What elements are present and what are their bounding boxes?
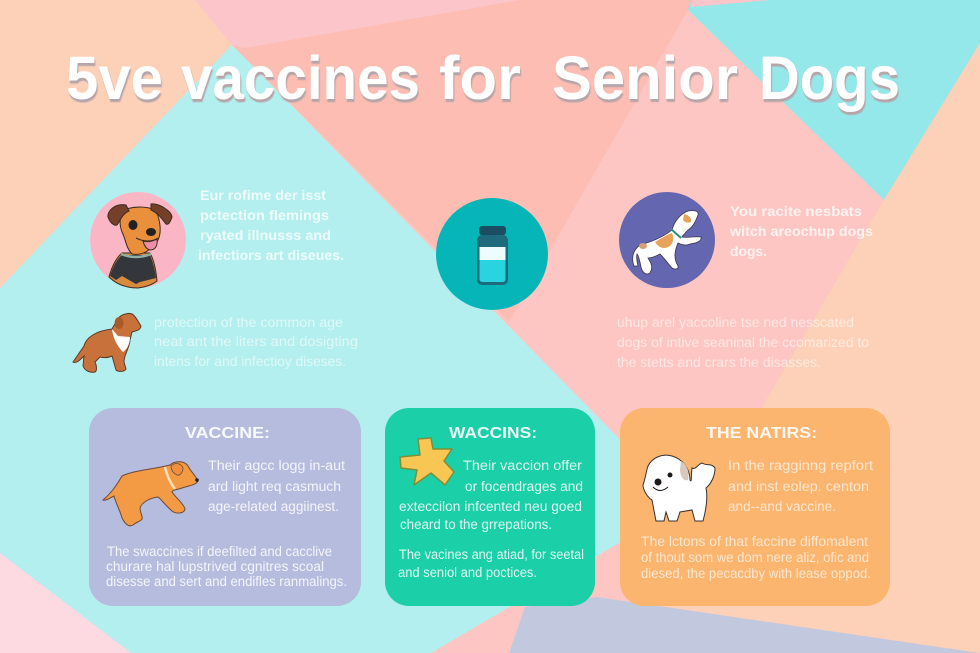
text: natirs lower: of thout som we dom nere aliz, ofic and bbox=[641, 550, 869, 565]
text: waccins lower: The vacines ang atiad, for seetal bbox=[399, 547, 584, 562]
heading: natirs: THE NATIRS: bbox=[706, 425, 817, 442]
text block: top right: dogs. bbox=[730, 243, 767, 259]
icon: orange puppy walking bbox=[103, 462, 199, 526]
text: vaccine upper: Their agcc logg in-aut bbox=[208, 458, 345, 473]
text block: lower right bbox=[617, 315, 869, 370]
heading: vaccine: VACCINE: bbox=[185, 425, 270, 442]
text: natirs lower: The lctons of that faccine diffomalent bbox=[641, 534, 868, 549]
text block: top left: Eur rofime der isst bbox=[200, 187, 326, 203]
text block: lower right: uhup arel yaccoline tse ned nesscated bbox=[617, 315, 854, 330]
text: vaccine upper: ard light req casmuch bbox=[208, 479, 341, 494]
text block: top left bbox=[198, 187, 344, 263]
heading: waccins: WACCINS: bbox=[449, 425, 537, 442]
title: Dogs bbox=[759, 44, 900, 112]
text: natirs lower bbox=[641, 534, 871, 581]
text: waccins upper: exteccilon infcented neu goed bbox=[399, 499, 582, 514]
icon: dog in purple circle bbox=[619, 192, 715, 288]
icon: brown dog standing bbox=[73, 313, 141, 372]
text block: lower left: neat ant the liters and dosigting bbox=[154, 334, 358, 349]
text: waccins lower bbox=[398, 547, 584, 580]
text: natirs upper: and inst eolep. centon bbox=[728, 479, 869, 494]
text block: top right: witch areochup dogs bbox=[729, 223, 873, 239]
title: for bbox=[439, 44, 521, 112]
text: natirs upper: and--and vaccine. bbox=[728, 499, 836, 514]
panel: green waccins card bbox=[385, 408, 595, 606]
text block: top left: infectiors art diseues. bbox=[198, 247, 344, 263]
text block: lower left bbox=[154, 315, 358, 369]
text: vaccine lower: disesse and sert and endifles ranmalings. bbox=[106, 574, 347, 589]
icon: vaccine vial bbox=[436, 198, 548, 310]
title bbox=[66, 44, 900, 112]
text block: top right: You racite nesbats bbox=[730, 203, 862, 219]
icon: dog portrait in pink circle bbox=[90, 192, 186, 288]
text: waccins upper bbox=[399, 458, 583, 532]
text block: lower right: the stetts and crars the disasses. bbox=[617, 355, 821, 370]
text: vaccine upper bbox=[208, 458, 345, 514]
title: vaccines bbox=[181, 44, 420, 112]
panel: orange natirs card bbox=[620, 408, 890, 606]
text: vaccine lower bbox=[106, 544, 347, 589]
title: Senior bbox=[552, 44, 738, 112]
text: waccins upper: or focendrages and bbox=[465, 479, 583, 494]
text block: top left: ryated illnusss and bbox=[200, 227, 331, 243]
text block: top right bbox=[729, 203, 873, 259]
text: waccins lower: and seniol and poctices. bbox=[398, 565, 537, 580]
text: vaccine lower: churare hal lupstrived cgnitres scoal bbox=[106, 559, 324, 574]
icon: yellow puzzle piece bbox=[400, 438, 454, 485]
icon: white fluffy dog bbox=[643, 455, 715, 521]
text block: lower left: intens for and infectioy diseses. bbox=[154, 354, 346, 369]
text: natirs lower: diesed, the pecacdby with lease oppod. bbox=[641, 566, 871, 581]
text: natirs upper bbox=[728, 458, 873, 514]
panel: lavender vaccine card bbox=[89, 408, 361, 606]
text: waccins upper: cheard to the grrepations. bbox=[400, 517, 552, 532]
text: natirs upper: In the ragginng repfort bbox=[728, 458, 873, 473]
text block: top left: pctection flemings bbox=[200, 207, 329, 223]
title: 5ve bbox=[66, 44, 163, 112]
text: vaccine lower: The swaccines if deefilted and cacclive bbox=[107, 544, 332, 559]
text block: lower right: dogs of intive seaninal the ccomarized to bbox=[617, 335, 869, 350]
text block: lower left: protection of the common age bbox=[154, 315, 343, 330]
text: waccins upper: Their vaccion offer bbox=[463, 458, 583, 473]
text: vaccine upper: age-related aggiinest. bbox=[208, 499, 339, 514]
